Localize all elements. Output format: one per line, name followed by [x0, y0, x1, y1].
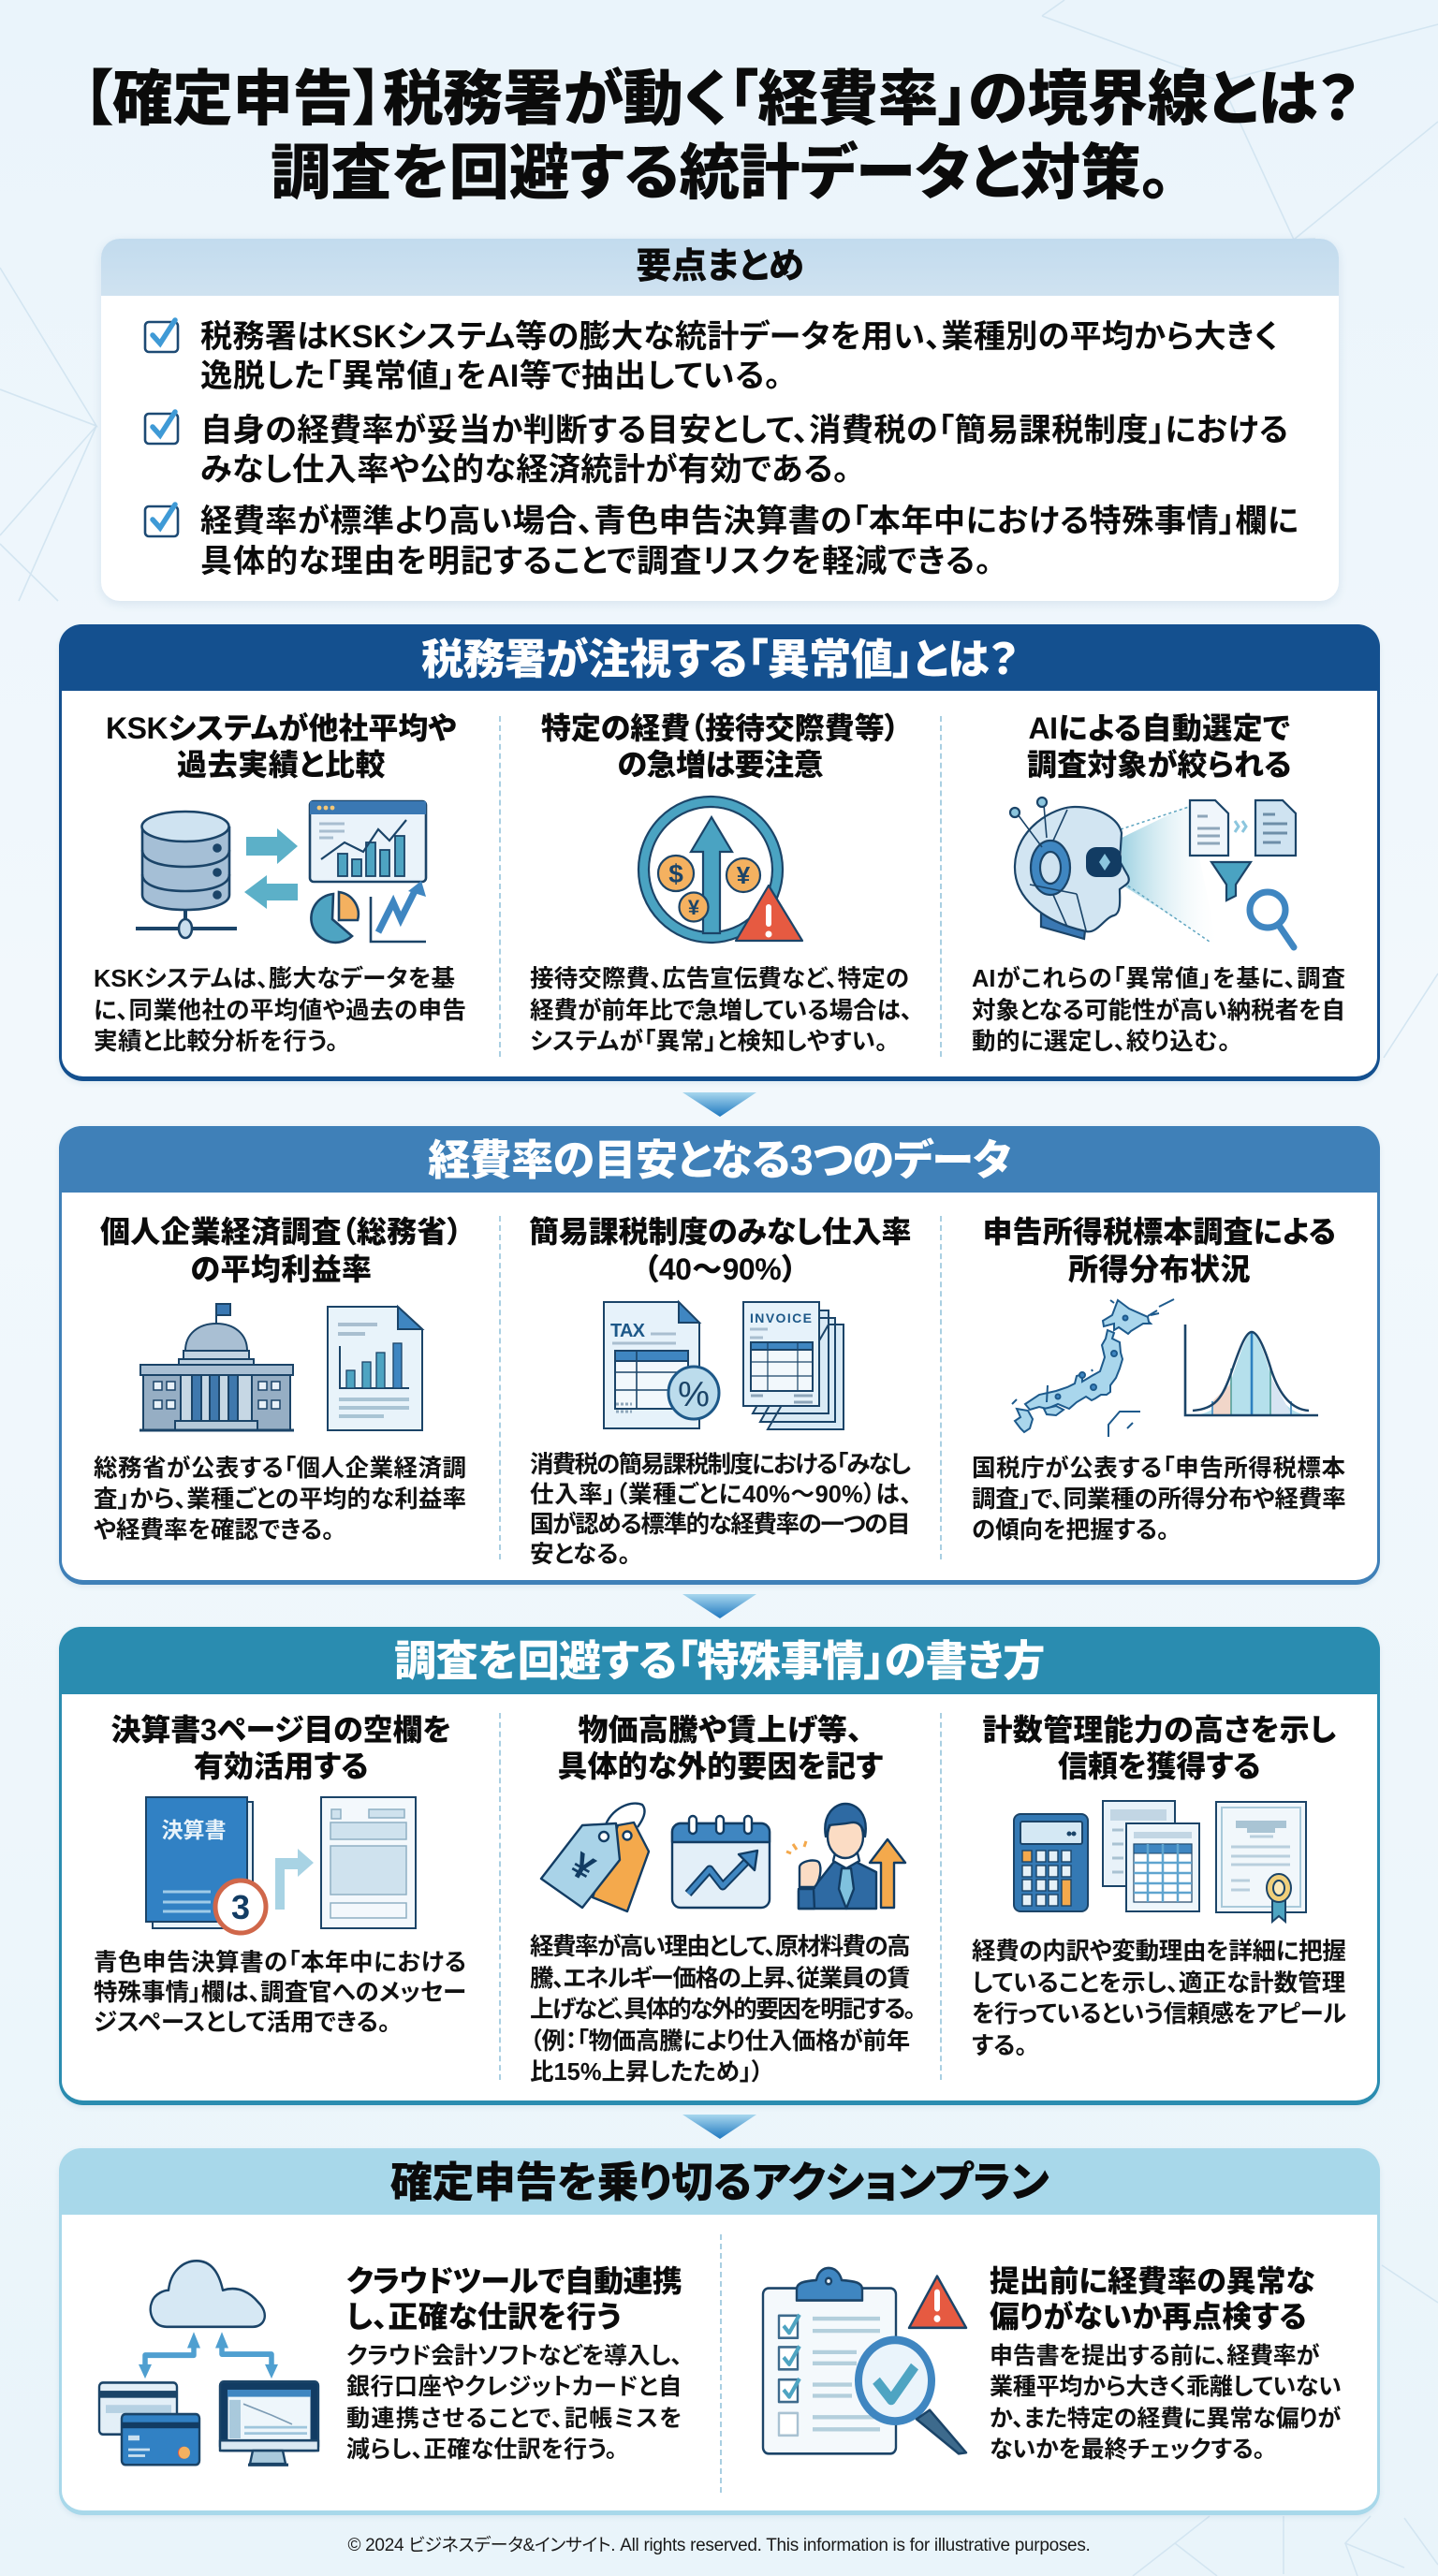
column text 1: 総務省が公表する「個人企業経済調 — [94, 1456, 466, 1482]
title: 【確定申告】税務署が動く「経費率」の境界線とは？ — [82, 66, 1358, 133]
column text 3: 動的に選定し、絞り込む。 — [972, 1029, 1230, 1055]
column text 2: 仕入率」（業種ごとに40%〜90%）は、 — [530, 1482, 912, 1508]
summary item 1: 税務署はKSKシステム等の膨大な統計データを用い、業種別の平均から大きく — [200, 319, 1278, 355]
summary item 1: 逸脱した「異常値」をAI等で抽出している。 — [200, 359, 781, 394]
action 2 text — [990, 2343, 1342, 2463]
column heading 1: 有効活用する — [194, 1749, 368, 1783]
column heading 1: 個人企業経済調査（総務省） — [100, 1215, 462, 1249]
summary item 3 — [200, 504, 1299, 579]
panel heading: 確定申告を乗り切るアクションプラン — [390, 2159, 1049, 2206]
column heading 3 — [983, 1215, 1335, 1286]
action 2 text: ないかを最終チェックする。 — [990, 2437, 1265, 2463]
panel heading: 経費率の目安となる3つのデータ — [428, 1136, 1011, 1184]
column heading 2: 具体的な外的要因を記す — [558, 1749, 882, 1783]
icon: price tags, calendar and businessman: ¥ — [564, 1846, 601, 1889]
column text 2: 消費税の簡易課税制度における「みなし — [530, 1452, 909, 1478]
column text 2 — [530, 1451, 912, 1568]
column text 3: 対象となる可能性が高い納税者を自 — [972, 998, 1345, 1024]
panel heading: 税務署が注視する「異常値」とは？ — [421, 636, 1018, 683]
column text 2: 上げなど、具体的な外的要因を明記する。 — [530, 1997, 914, 2023]
panel: summary — [101, 239, 1339, 601]
panel: アクションプラン — [59, 2148, 1380, 2515]
column heading 1 — [106, 711, 456, 782]
column text 2: システムが「異常」と検知しやすい。 — [530, 1029, 888, 1055]
panel heading: 調査を回避する「特殊事情」の書き方 — [394, 1637, 1045, 1685]
column text 1: 査」から、業種ごとの平均的な利益率 — [94, 1486, 466, 1513]
panel: 3つのデータ — [59, 1126, 1380, 1585]
column heading 3: 所得分布状況 — [1068, 1252, 1250, 1286]
column text 2: 比15%上昇したため」） — [530, 2059, 764, 2086]
column text 1 — [94, 966, 466, 1055]
column heading 2: （40〜90%） — [644, 1252, 796, 1286]
column heading 1 — [110, 1713, 451, 1783]
action 1 heading: クラウドツールで自動連携 — [346, 2264, 682, 2298]
panel heading — [59, 2148, 1380, 2215]
column text 3: 国税庁が公表する「申告所得税標本 — [972, 1456, 1345, 1482]
column heading 3: 申告所得税標本調査による — [983, 1215, 1335, 1249]
column text 2: 経費が前年比で急増している場合は、 — [530, 998, 913, 1024]
column text 3: 調査」で、同業種の所得分布や経費率 — [972, 1486, 1345, 1513]
icon: surge with warning: ¥ — [688, 896, 700, 919]
column text 3: の傾向を把握する。 — [972, 1517, 1169, 1544]
column heading 1: 過去実績と比較 — [177, 748, 385, 782]
column text 3: AIがこれらの「異常値」を基に、調査 — [972, 966, 1345, 992]
column heading 3: 調査対象が絞られる — [1027, 748, 1291, 782]
summary item 2: みなし仕入率や公的な経済統計が有効である。 — [200, 452, 849, 488]
icon: tax and invoice documents: % — [678, 1375, 710, 1414]
column text 3: する。 — [972, 2033, 1027, 2059]
action 2 heading: 偏りがないか再点検する — [990, 2300, 1306, 2334]
column heading 3: 信頼を獲得する — [1058, 1749, 1260, 1783]
action 2 text: 申告書を提出する前に、経費率が — [990, 2343, 1319, 2369]
column heading 1 — [100, 1215, 462, 1286]
column text 1 — [94, 1949, 466, 2036]
column text 2 — [530, 966, 913, 1055]
action 1 text: 動連携させることで、記帳ミスを — [346, 2406, 682, 2432]
summary item 2: 自身の経費率が妥当か判断する目安として、消費税の「簡易課税制度」における — [200, 413, 1288, 448]
column text 1: KSKシステムは、膨大なデータを基 — [94, 966, 455, 992]
panel: 特殊事情 — [59, 1627, 1380, 2105]
title: 調査を回避する統計データと対策。 — [271, 139, 1170, 207]
column heading 2: 特定の経費（接待交際費等） — [541, 711, 899, 745]
column heading 1: の平均利益率 — [191, 1252, 371, 1286]
summary item 3: 具体的な理由を明記することで調査リスクを軽減できる。 — [200, 544, 991, 579]
summary heading — [101, 239, 1339, 296]
column text 3 — [972, 966, 1345, 1055]
column heading 3: AIによる自動選定で — [1028, 711, 1290, 745]
column text 2: 国が認める標準的な経費率の一つの目 — [530, 1512, 909, 1538]
action 1 text: クラウド会計ソフトなどを導入し、 — [346, 2343, 682, 2369]
column text 3: 経費の内訳や変動理由を詳細に把握 — [972, 1939, 1345, 1965]
summary item 3: 経費率が標準より高い場合、青色申告決算書の「本年中における特殊事情」欄に — [200, 504, 1299, 539]
summary heading: 要点まとめ — [636, 247, 804, 286]
column text 1: に、同業他社の平均値や過去の申告 — [94, 998, 466, 1024]
column text 1 — [94, 1455, 466, 1544]
icon: tax and invoice documents: INVOICE — [750, 1310, 812, 1325]
column text 2: （例：「物価高騰により仕入価格が前年 — [530, 2027, 910, 2054]
icon: report book and form: 3 — [231, 1888, 250, 1926]
column heading 2 — [541, 711, 899, 782]
action 1 text — [346, 2343, 682, 2463]
column text 2: 接待交際費、広告宣伝費など、特定の — [530, 966, 909, 992]
column text 1: 特殊事情」欄は、調査官へのメッセー — [94, 1980, 466, 2006]
summary item 2 — [200, 413, 1288, 488]
column text 3 — [972, 1939, 1346, 2059]
column text 2: 経費率が高い理由として、原材料費の高 — [530, 1934, 909, 1960]
column heading 3 — [983, 1713, 1336, 1783]
column text 2: 安となる。 — [530, 1542, 630, 1568]
column text 2: 騰、エネルギー価格の上昇、従業員の賃 — [530, 1966, 909, 1992]
icon: report book and form: 決算書 — [161, 1818, 227, 1842]
column heading 1: KSKシステムが他社平均や — [106, 711, 456, 745]
panel: 異常値 — [59, 624, 1380, 1081]
action 1 text: 減らし、正確な仕訳を行う。 — [346, 2437, 617, 2463]
column text 3 — [972, 1455, 1345, 1544]
action 1 heading — [346, 2264, 682, 2334]
action 2 heading — [990, 2264, 1314, 2334]
column heading 3 — [1027, 711, 1291, 782]
footer: © 2024 ビジネスデータ&インサイト. All rights reserved. This information is for illustrative purposes. — [347, 2536, 1091, 2555]
column heading 2 — [558, 1713, 883, 1783]
column heading 2: の急増は要注意 — [618, 748, 823, 782]
icon: surge with warning: $ — [668, 859, 683, 888]
panel heading — [59, 1126, 1380, 1193]
column text 1: 青色申告決算書の「本年中における — [94, 1950, 466, 1976]
summary item 1 — [200, 319, 1278, 394]
action 2 heading: 提出前に経費率の異常な — [990, 2264, 1314, 2298]
column text 2 — [530, 1934, 914, 2086]
action 2 text: 業種平均から大きく乖離していない — [990, 2374, 1342, 2400]
column heading 3: 計数管理能力の高さを示し — [983, 1713, 1335, 1747]
column heading 2: 簡易課税制度のみなし仕入率 — [529, 1215, 911, 1249]
panel heading — [59, 1627, 1380, 1694]
column text 1: や経費率を確認できる。 — [94, 1517, 334, 1544]
panel heading — [59, 624, 1380, 691]
action 2 text: か、また特定の経費に異常な偏りが — [990, 2406, 1341, 2432]
action 1 text: 銀行口座やクレジットカードと自 — [346, 2374, 682, 2400]
icon: surge with warning: ¥ — [737, 861, 751, 889]
title — [82, 66, 1358, 207]
action 1 heading: し、正確な仕訳を行う — [346, 2300, 621, 2334]
column text 1: ジスペースとして活用できる。 — [94, 2010, 390, 2036]
icon: tax and invoice documents: TAX — [610, 1321, 646, 1341]
column heading 1: 決算書3ページ目の空欄を — [110, 1713, 451, 1747]
column heading 2: 物価高騰や賃上げ等、 — [579, 1713, 861, 1747]
column text 3: していることを示し、適正な計数管理 — [972, 1969, 1345, 1996]
column text 3: を行っているという信頼感をアピール — [972, 2001, 1346, 2027]
column heading 2 — [529, 1215, 911, 1286]
column text 1: 実績と比較分析を行う。 — [94, 1029, 338, 1055]
